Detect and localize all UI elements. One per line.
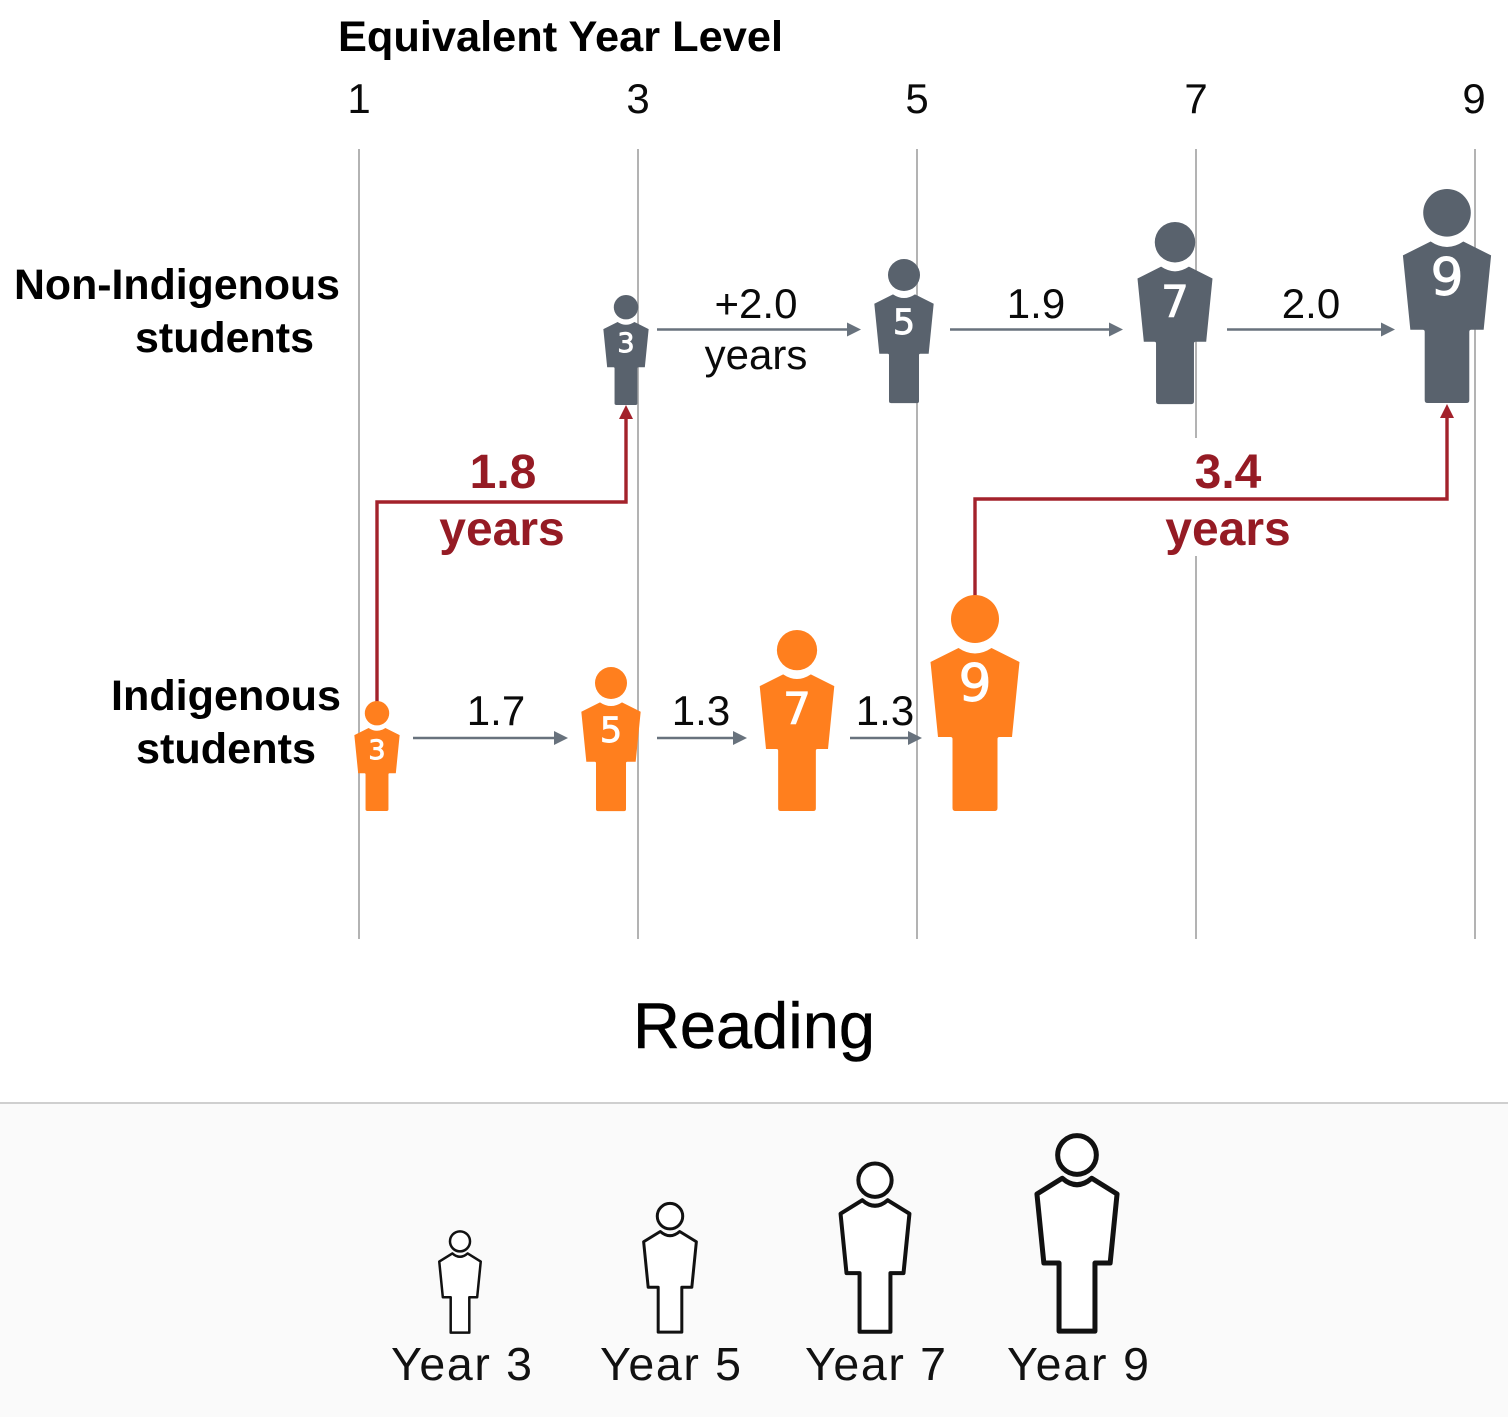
indigenous year 9 figure: 9 [958, 654, 992, 714]
axis title: Equivalent Year Level [338, 13, 783, 61]
indigenous year 3 figure [354, 701, 400, 811]
non-indigenous year 3 figure: 3 [617, 328, 635, 359]
non-indigenous year 5 figure: 5 [893, 303, 915, 343]
indigenous year 5 figure [581, 667, 641, 811]
growth arrow: +2.0 years: years [705, 331, 807, 378]
red gap arrow: 3.4 years [975, 404, 1454, 596]
indigenous year 9 figure [930, 595, 1020, 811]
axis labels: 3 [626, 75, 650, 122]
growth arrow: 1.3 (first): 1.3 [672, 687, 730, 734]
red gap arrow: 3.4 years: years [1165, 503, 1291, 556]
axis labels: 5 [905, 75, 929, 122]
growth arrow: 2.0 [1227, 280, 1395, 336]
growth arrow: 1.7 [413, 687, 568, 745]
non-indigenous year 9 figure: 9 [1430, 248, 1464, 308]
row label: Indigenous students [111, 672, 341, 773]
legend: Year 9: Year 9 [1007, 1338, 1149, 1390]
legend: Year 9 [1007, 1136, 1149, 1390]
indigenous year 7 figure: 7 [783, 684, 811, 735]
legend background [0, 1102, 1508, 1417]
legend: Year 5 [600, 1203, 741, 1390]
indigenous year 7 figure [760, 630, 834, 811]
legend: Year 3 [391, 1231, 532, 1390]
axis labels [347, 75, 1486, 122]
indigenous year 3 figure: 3 [368, 735, 386, 766]
chart title: Reading: Reading [633, 990, 875, 1062]
non-indigenous year 7 figure [1137, 222, 1213, 404]
row label: Indigenous students: Indigenous [111, 672, 341, 720]
growth arrow: 1.9: 1.9 [1007, 280, 1065, 327]
non-indigenous year 7 figure: 7 [1161, 277, 1189, 328]
red gap arrow: 3.4 years: 3.4 [1195, 446, 1262, 499]
axis labels: 9 [1462, 75, 1486, 122]
growth arrow: 1.7: 1.7 [467, 687, 525, 734]
growth arrow: +2.0 years [657, 280, 861, 378]
growth arrow: 1.3 (first) [657, 687, 747, 745]
non-indigenous year 5 figure [874, 259, 934, 403]
red gap arrow: 1.8 years: years [439, 503, 565, 556]
row label: Non-Indigenous students [14, 261, 340, 362]
legend: Year 5: Year 5 [600, 1338, 741, 1390]
non-indigenous year 9 figure [1403, 189, 1491, 403]
indigenous year 5 figure: 5 [600, 711, 622, 751]
row label: Indigenous students: students [136, 725, 316, 773]
row label: Non-Indigenous students: students [135, 314, 314, 362]
legend: Year 3: Year 3 [391, 1338, 532, 1390]
axis labels: 7 [1184, 75, 1208, 122]
red gap arrow: 1.8 years [377, 405, 633, 702]
red gap arrow: 1.8 years: 1.8 [470, 446, 536, 499]
axis labels: 1 [347, 75, 371, 122]
growth arrow: +2.0 years: +2.0 [715, 280, 797, 327]
non-indigenous year 3 figure [603, 295, 649, 405]
growth arrow: 2.0: 2.0 [1282, 280, 1340, 327]
legend: Year 7: Year 7 [805, 1338, 946, 1390]
growth arrow: 1.3 (second) [850, 687, 922, 745]
growth arrow: 1.9 [950, 280, 1123, 336]
legend: Year 7 [805, 1164, 946, 1390]
row label: Non-Indigenous students: Non-Indigenous [14, 261, 340, 309]
growth arrow: 1.3 (second): 1.3 [856, 687, 914, 734]
